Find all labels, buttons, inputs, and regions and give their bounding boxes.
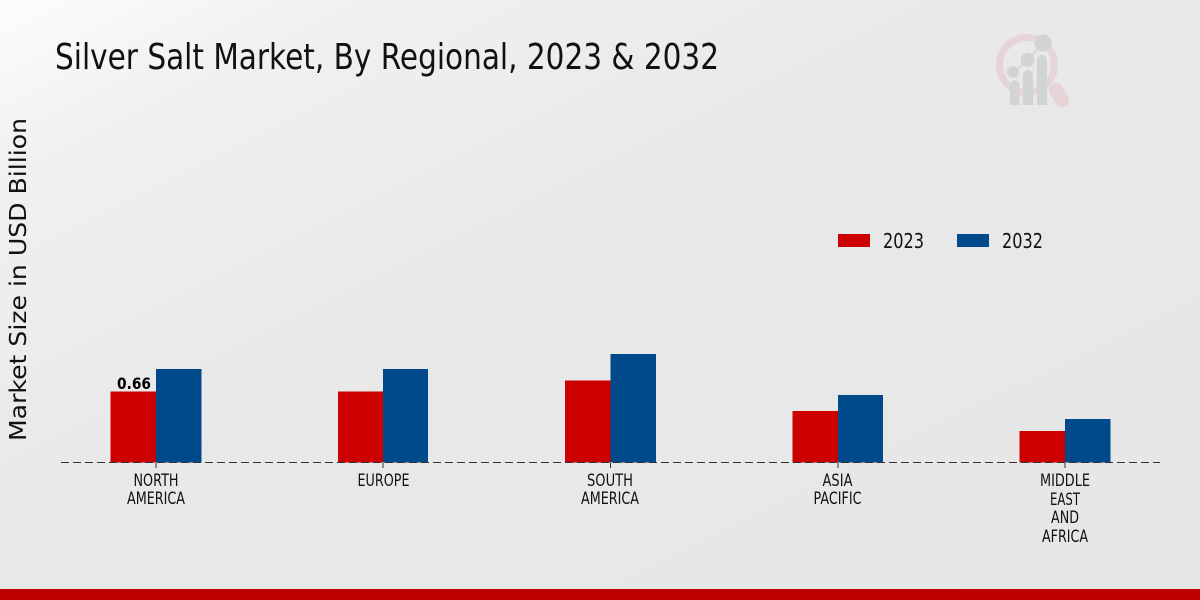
axis label: Middle East and Africa: EAST	[1050, 490, 1081, 509]
legend item: 2032	[957, 229, 1043, 253]
bars: North America	[110, 369, 202, 462]
legend item: 2032: 2032	[1002, 229, 1043, 253]
legend	[838, 229, 1043, 253]
axis label: South America: SOUTH	[587, 471, 633, 490]
bar chart	[61, 354, 1160, 546]
axis label: Asia Pacific: PACIFIC	[814, 489, 862, 508]
axis label: North America: AMERICA	[127, 489, 186, 508]
bars: South America	[565, 354, 656, 462]
axis label: Middle East and Africa: MIDDLE	[1040, 471, 1090, 490]
axis label: Middle East and Africa: AFRICA	[1042, 527, 1089, 546]
axis label: South America: AMERICA	[581, 489, 640, 508]
data label: 0.66: 0.66	[117, 374, 151, 393]
footer bar	[0, 589, 1200, 600]
icon: watermark logo	[1000, 34, 1062, 105]
axis label: Middle East and Africa: AND	[1051, 508, 1079, 527]
title: Silver Salt Market, By Regional, 2023 & 2032	[55, 37, 719, 78]
axis label: North America: NORTH	[134, 471, 178, 490]
y-axis label: Market Size in USD Billion	[6, 118, 32, 441]
bars: Europe	[338, 369, 428, 462]
bars: Asia Pacific	[792, 395, 883, 462]
axis label: Europe: EUROPE	[358, 471, 410, 490]
legend item: 2023: 2023	[883, 229, 924, 253]
axis label: Asia Pacific: ASIA	[822, 471, 853, 490]
legend item: 2023	[838, 229, 924, 253]
bars: Middle East and Africa	[1020, 419, 1110, 462]
